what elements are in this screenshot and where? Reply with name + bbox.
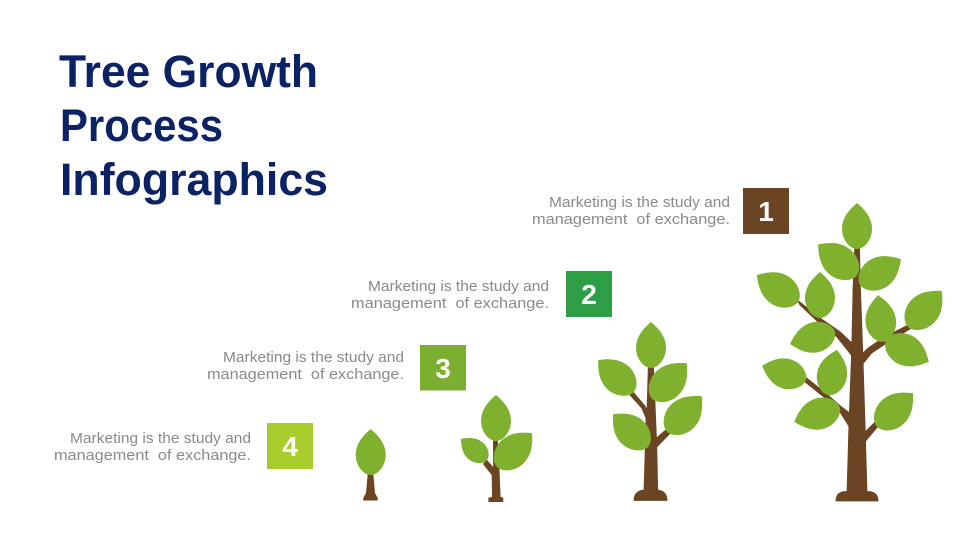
title: Infographics (60, 154, 328, 205)
step 4 description: management of exchange. (54, 447, 251, 464)
tree stage 2: young tree (588, 322, 713, 500)
tree stage 1: mature tree (748, 203, 954, 501)
step 2 number badge (566, 271, 612, 317)
step 4 number badge (267, 423, 313, 469)
step 3 number badge (420, 345, 466, 390)
young tree leaves (588, 322, 713, 458)
title: Process (60, 100, 223, 151)
step 2 number badge: 2 (581, 279, 597, 310)
mature tree trunk, branches and base (797, 248, 912, 501)
step 4 description (54, 430, 251, 464)
step 1 number badge: 1 (758, 196, 774, 227)
seedling trunk (363, 474, 378, 500)
step 3 description (207, 349, 404, 383)
step 3 description: Marketing is the study and (223, 349, 404, 366)
title (59, 46, 328, 205)
sapling trunk and branch (483, 441, 503, 502)
step 1 description: Marketing is the study and (549, 194, 730, 211)
tree stage 4: seedling (356, 429, 386, 500)
step 2 description: management of exchange. (351, 295, 549, 312)
seedling leaf (356, 429, 386, 475)
step 2 description (351, 278, 549, 312)
step 1 description (532, 194, 730, 228)
young tree trunk and branches (630, 367, 671, 500)
step 2 description: Marketing is the study and (368, 278, 549, 295)
tree stage 3: sapling (454, 395, 543, 502)
step 4 description: Marketing is the study and (70, 430, 251, 447)
step 1 description: management of exchange. (532, 211, 730, 228)
sapling leaves (454, 395, 543, 478)
step 4 number badge: 4 (282, 431, 298, 462)
step 3 number badge: 3 (435, 353, 451, 384)
step 1 number badge (743, 188, 789, 234)
mature tree leaves (748, 203, 954, 439)
title: Tree Growth (59, 46, 318, 97)
step 3 description: management of exchange. (207, 366, 404, 383)
